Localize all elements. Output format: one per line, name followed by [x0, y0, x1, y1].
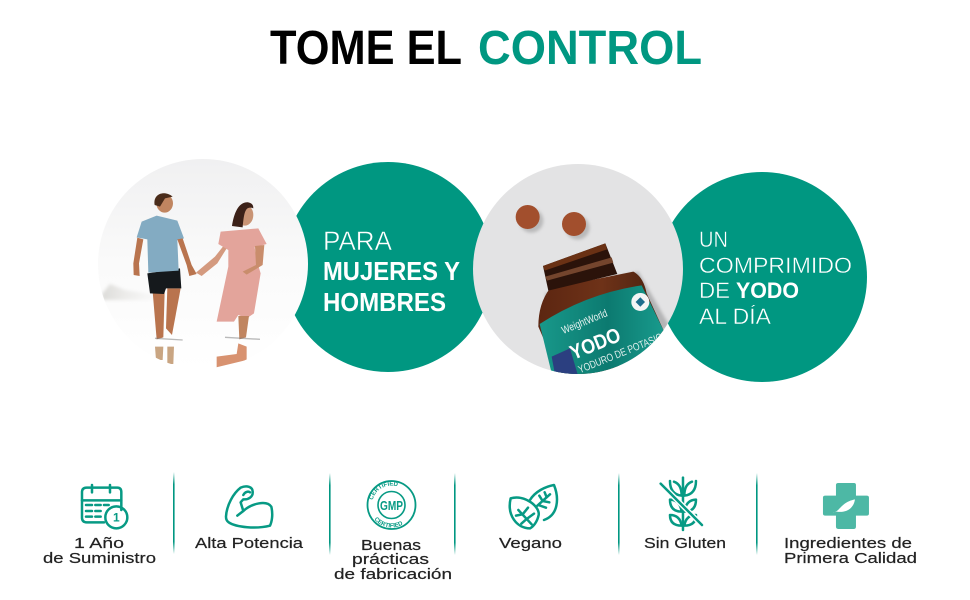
circle: un comprimido de yodo al día: YODO: [736, 278, 799, 303]
circle: para mujeres y hombres: [283, 162, 493, 372]
feature: buenas prácticas de fabricación: [334, 480, 452, 583]
feature: ingredientes de primera calidad: Ingredientes de: [784, 535, 912, 552]
feature: vegano: Vegano: [499, 535, 562, 552]
photo: couple walking on the beach: [98, 159, 308, 369]
feature: 1 año de suministro: [43, 485, 156, 567]
photo: bottle and tablets: [473, 164, 683, 374]
feature: 1 año de suministro: 1 Año: [74, 535, 124, 552]
icon: GMP stamp: GMP: [380, 498, 403, 513]
circle: para mujeres y hombres: HOMBRES: [323, 287, 446, 317]
circle: un comprimido de yodo al día: AL DÍA: [699, 304, 771, 329]
icon: GMP stamp: CERTIFIED: [369, 482, 398, 500]
feature: 1 año de suministro: de Suministro: [43, 550, 156, 567]
bottle: [538, 243, 668, 374]
title: [270, 22, 702, 75]
feature: vegano: [499, 485, 562, 552]
panel: circles row: [98, 159, 867, 400]
title: CONTROL: [478, 22, 702, 75]
icon: flexed arm: [226, 486, 272, 527]
bottle: YODURO DE POTASIO: [577, 331, 665, 376]
bottle: WeightWorld: [560, 308, 609, 337]
feature: ingredientes de primera calidad: Primera Calidad: [784, 550, 917, 567]
icon: GMP stamp: [366, 480, 416, 530]
feature: sin gluten: [644, 478, 726, 552]
feature: ingredientes de primera calidad: [784, 483, 917, 567]
bottle: YODO: [567, 324, 624, 365]
feature: buenas prácticas de fabricación: prácticas: [352, 551, 429, 568]
feature: buenas prácticas de fabricación: de fabricación: [334, 566, 452, 583]
circle: un comprimido de yodo al día: UN: [699, 227, 728, 252]
feature: alta potencia: Alta Potencia: [195, 535, 304, 552]
circle: un comprimido de yodo al día: DE: [699, 278, 730, 303]
icon: cross with leaf: [823, 483, 869, 529]
feature: alta potencia: [195, 486, 304, 552]
circle: un comprimido de yodo al día: COMPRIMIDO: [699, 253, 852, 278]
circle: un comprimido de yodo al día: [657, 172, 867, 382]
title: TOME EL: [270, 22, 462, 75]
feature: buenas prácticas de fabricación: Buenas: [361, 537, 421, 554]
icon: crossed wheat: [661, 478, 702, 530]
icon: two leaves: [510, 485, 557, 528]
feature: sin gluten: Sin Gluten: [644, 535, 726, 552]
circle: para mujeres y hombres: PARA: [323, 226, 392, 256]
dividers: [173, 472, 758, 555]
circle: para mujeres y hombres: MUJERES Y: [323, 256, 460, 286]
tablets: [516, 205, 590, 240]
icon: GMP stamp: CERTIFIED: [375, 517, 402, 528]
icon: calendar: 1: [113, 511, 120, 525]
